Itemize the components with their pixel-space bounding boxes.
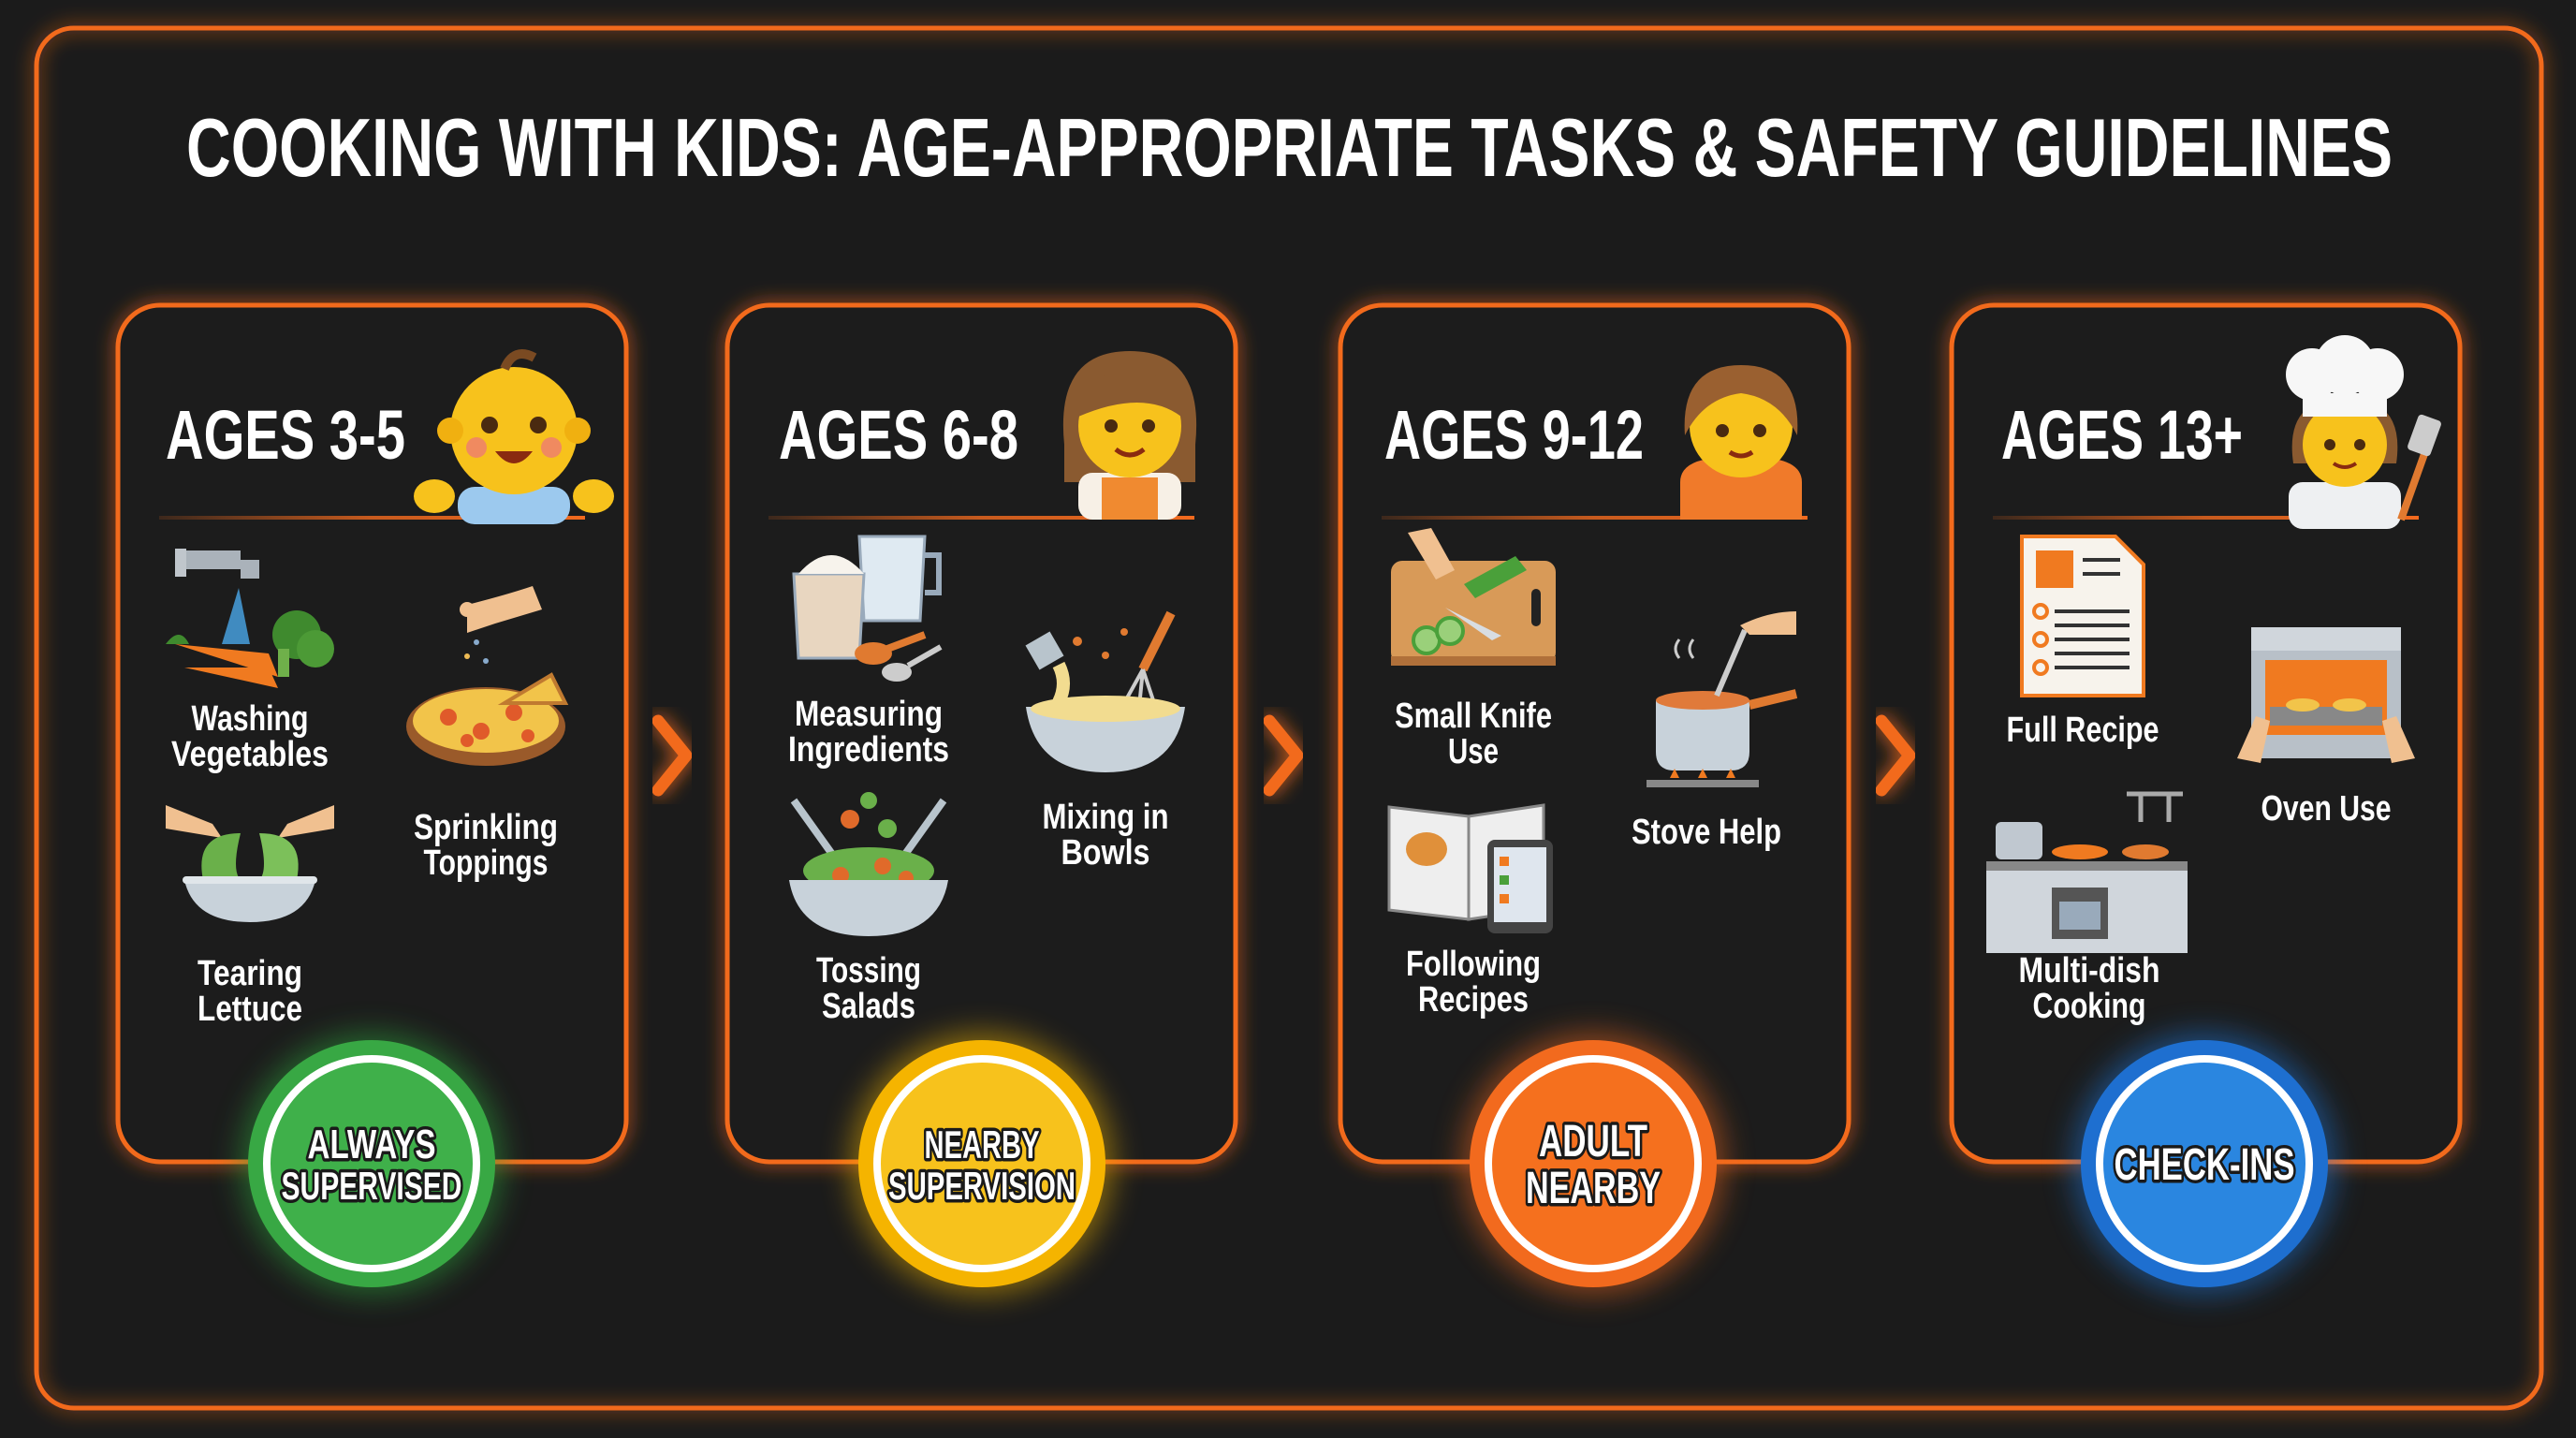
task: tossing salads: Salads <box>822 987 915 1026</box>
icon: boy <box>1680 365 1802 520</box>
task: mixing in bowls: Mixing in <box>1043 798 1168 837</box>
task: tearing lettuce <box>166 805 334 1029</box>
arrow: 1 to 2 <box>658 721 686 790</box>
task: full recipe <box>2007 536 2159 750</box>
badge: adult nearby: ADULT <box>1539 1117 1647 1167</box>
task: following recipes: Recipes <box>1418 980 1529 1020</box>
task: washing vegetables <box>166 549 334 774</box>
task: mixing in bowls <box>1026 613 1185 873</box>
task: oven use <box>2237 627 2415 829</box>
arrow: 3 to 4 <box>1881 721 1910 790</box>
badge: adult nearby: NEARBY <box>1526 1164 1661 1213</box>
panel: ages 3-5 <box>118 305 626 1162</box>
icon: teen chef <box>2286 335 2442 529</box>
panel: ages 6-8 <box>727 305 1236 1162</box>
badge: always supervised: SUPERVISED <box>281 1164 462 1208</box>
badge: adult nearby <box>1462 1033 1724 1295</box>
badge: always supervised <box>241 1033 503 1295</box>
task: small knife use <box>1391 528 1556 771</box>
heading: ages 9-12: AGES 9-12 <box>1384 396 1644 474</box>
badge: nearby supervision: NEARBY <box>925 1123 1039 1167</box>
task: tearing lettuce: Tearing <box>198 954 302 993</box>
task: measuring ingredients <box>788 536 949 770</box>
task: sprinkling toppings: Sprinkling <box>414 808 558 847</box>
heading: ages 13+: AGES 13+ <box>2001 396 2243 474</box>
task: multi-dish cooking: Cooking <box>2033 987 2145 1026</box>
badge: nearby supervision: SUPERVISION <box>888 1164 1076 1208</box>
task: sprinkling toppings <box>406 586 565 883</box>
panel: ages 9-12 <box>1340 305 1849 1162</box>
task: small knife use: Use <box>1448 732 1499 771</box>
task: mixing in bowls: Bowls <box>1061 833 1149 873</box>
icon: baby <box>414 354 614 524</box>
task: tossing salads <box>789 792 948 1026</box>
task: multi-dish cooking: Multi-dish <box>2018 951 2160 990</box>
badge: check-ins <box>2073 1033 2335 1295</box>
task: measuring ingredients: Ingredients <box>788 730 949 770</box>
task: tossing salads: Tossing <box>816 951 921 990</box>
task: stove help <box>1632 611 1796 852</box>
task: multi-dish cooking <box>1986 794 2188 1026</box>
task: full recipe: Full Recipe <box>2007 711 2159 750</box>
badge: check-ins: CHECK-INS <box>2114 1140 2295 1190</box>
task: stove help: Stove Help <box>1632 813 1781 852</box>
heading: ages 3-5: AGES 3-5 <box>166 396 405 474</box>
heading: ages 6-8: AGES 6-8 <box>779 396 1018 474</box>
task: following recipes: Following <box>1406 945 1541 984</box>
task: small knife use: Small Knife <box>1395 697 1552 736</box>
task: following recipes <box>1389 805 1553 1020</box>
badge: nearby supervision <box>851 1033 1113 1295</box>
task: sprinkling toppings: Toppings <box>423 844 549 883</box>
task: washing vegetables: Vegetables <box>171 735 329 774</box>
arrow: 2 to 3 <box>1269 721 1297 790</box>
task: measuring ingredients: Measuring <box>795 695 943 734</box>
icon: girl <box>1063 351 1196 520</box>
task: tearing lettuce: Lettuce <box>198 990 302 1029</box>
badge: always supervised: ALWAYS <box>307 1122 436 1167</box>
task: oven use: Oven Use <box>2261 789 2391 829</box>
panel: ages 13+ <box>1952 305 2460 1162</box>
task: washing vegetables: Washing <box>191 699 309 739</box>
